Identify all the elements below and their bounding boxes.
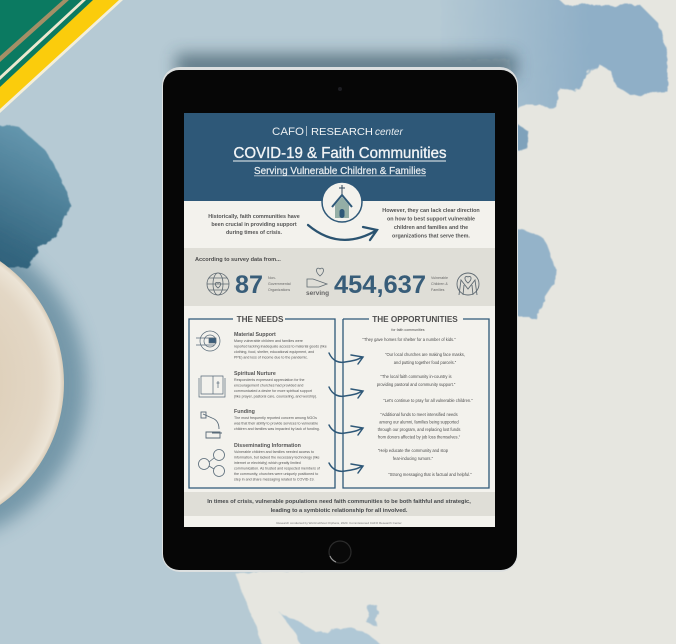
conclusion band: In times of crisis, vulnerable populations need faith communities to be both faithful and strategic, — [207, 499, 471, 505]
quotes: and putting together food parcels." — [394, 360, 457, 365]
quotes: "Our local churches are making face masks, — [385, 352, 465, 357]
item: disseminating information: Vulnerable children and families needed access to — [234, 450, 314, 454]
screen: infographic — [184, 113, 495, 527]
icon: funding — [201, 412, 222, 438]
panel: the opportunities — [343, 315, 489, 488]
item: material support: reported lacking inadequate access to material goods (like — [234, 344, 327, 348]
label: organizations — [268, 276, 291, 292]
item: funding — [234, 409, 320, 431]
text: however: organizations that serve them. — [392, 234, 470, 240]
quotes: "They gave homes for shelter for a number of kids." — [362, 337, 456, 342]
icon: material support — [196, 331, 220, 351]
text: historically: Historically, faith communities have — [208, 214, 300, 220]
item: disseminating information: communication. As trusted and respected members of — [234, 466, 320, 470]
stats band — [184, 248, 495, 306]
text: however: children and families and the — [394, 225, 468, 231]
heading: THE OPPORTUNITIES — [372, 315, 458, 324]
icon: globe — [207, 273, 229, 295]
item: disseminating information: Disseminating Information — [234, 443, 301, 449]
heading: THE NEEDS — [237, 315, 284, 324]
logo line — [272, 126, 403, 138]
label: children — [431, 276, 448, 292]
tablet shadow — [176, 54, 516, 78]
item: disseminating information: step in and share messaging related to COVID-19. — [234, 478, 315, 482]
item: spiritual nurture: encouragement churches had provided and — [234, 384, 303, 388]
arrow: curved — [308, 225, 377, 240]
plate on the left — [0, 227, 86, 543]
number 87: 87 — [235, 271, 263, 299]
quotes — [362, 328, 473, 477]
conclusion band: leading to a symbiotic relationship for all involved. — [271, 508, 408, 514]
quotes: "Strong messaging that is factual and helpful." — [388, 472, 472, 477]
item: disseminating information: the community, churches were uniquely positioned to — [234, 472, 318, 476]
tablet body — [162, 67, 518, 572]
quotes: providing pastoral and community support." — [377, 382, 456, 387]
quotes: for faith communities — [391, 328, 425, 332]
item: disseminating information — [234, 443, 320, 482]
quotes: "The local faith community in-country is — [380, 374, 452, 379]
item: material support: Many vulnerable children and families were — [234, 339, 303, 343]
quotes: "Help educate the community and stop — [378, 448, 449, 453]
book corner: green and yellow — [0, 0, 123, 113]
label: organizations: Governmental — [268, 282, 291, 286]
item: material support — [234, 332, 327, 360]
icon: hands and heart — [457, 273, 479, 295]
panel: the needs — [189, 315, 335, 488]
arrows: needs to opportunities — [329, 353, 363, 473]
item: spiritual nurture — [234, 371, 317, 398]
icon: bible — [199, 376, 225, 397]
subtitle: Serving Vulnerable Children & Families — [254, 165, 426, 177]
logo line: RESEARCH — [311, 126, 373, 138]
item: spiritual nurture: Spiritual Nurture — [234, 371, 276, 377]
item: material support: PPE) and loss of income due to the pandemic. — [234, 356, 308, 360]
logo line: CAFO — [272, 126, 304, 138]
icon: camera — [338, 87, 342, 91]
item: spiritual nurture: communicated a desire for more spiritual support — [234, 389, 312, 393]
label: children: Vulnerable — [431, 276, 448, 280]
label: children: Families — [431, 288, 445, 292]
number 454,637: 454,637 — [334, 271, 426, 299]
icon: home button — [329, 541, 351, 563]
label: serving: serving — [306, 290, 329, 297]
quotes: "Additional funds to meet intensified needs — [380, 412, 458, 417]
item: funding: children and families was impacted by lack of funding. — [234, 427, 320, 431]
quotes: among our alumni, families being supported — [379, 420, 459, 424]
item: funding: The most frequently reported concern among NGOs — [234, 416, 317, 420]
title: COVID-19 & Faith Communities — [234, 145, 447, 162]
quotes: from donors affected by job loss themselves." — [378, 434, 461, 440]
item: spiritual nurture: Respondents expressed appreciation for the — [234, 378, 305, 382]
conclusion band — [184, 492, 495, 516]
text: historically: during times of crisis. — [226, 230, 283, 236]
text: according: According to survey data from... — [195, 257, 281, 263]
text: however: on how to best support vulnerable — [387, 216, 475, 222]
item: funding: was that their ability to provide services to vulnerable — [234, 422, 318, 426]
label: organizations: Non- — [268, 276, 277, 280]
background: dark blue stain — [0, 122, 71, 268]
icon: church badge — [322, 182, 362, 222]
item: funding: Funding — [234, 409, 255, 415]
footnote: Research conducted by World without Orphans, 2020. Commissioned CAFO Research Center — [276, 521, 402, 525]
item: material support: clothing, food, shelter, educational equipment, and — [234, 350, 314, 354]
text: historically — [208, 214, 300, 236]
logo line: center — [375, 127, 403, 138]
text: historically: been crucial in providing support — [211, 222, 297, 228]
item: spiritual nurture: (like prayer, pastoral care, counseling, and worship). — [234, 394, 317, 398]
text: however — [382, 208, 480, 240]
quotes: through our program, and replacing lost funds — [378, 427, 460, 432]
item: disseminating information: information, but lacked the necessary technology (like — [234, 456, 320, 460]
quotes: fear-inducing rumors." — [393, 456, 434, 461]
item: material support: Material Support — [234, 332, 276, 338]
label: organizations: Organizations — [268, 288, 290, 292]
quotes: "Let's continue to pray for all vulnerable children." — [383, 398, 473, 403]
item: disseminating information: internet or electricity) which greatly limited — [234, 461, 301, 465]
text: however: However, they can lack clear direction — [382, 208, 480, 214]
label: children: Children & — [431, 282, 448, 286]
icon: hand with heart — [307, 268, 327, 287]
icon: network — [198, 450, 224, 476]
header band — [184, 113, 495, 201]
